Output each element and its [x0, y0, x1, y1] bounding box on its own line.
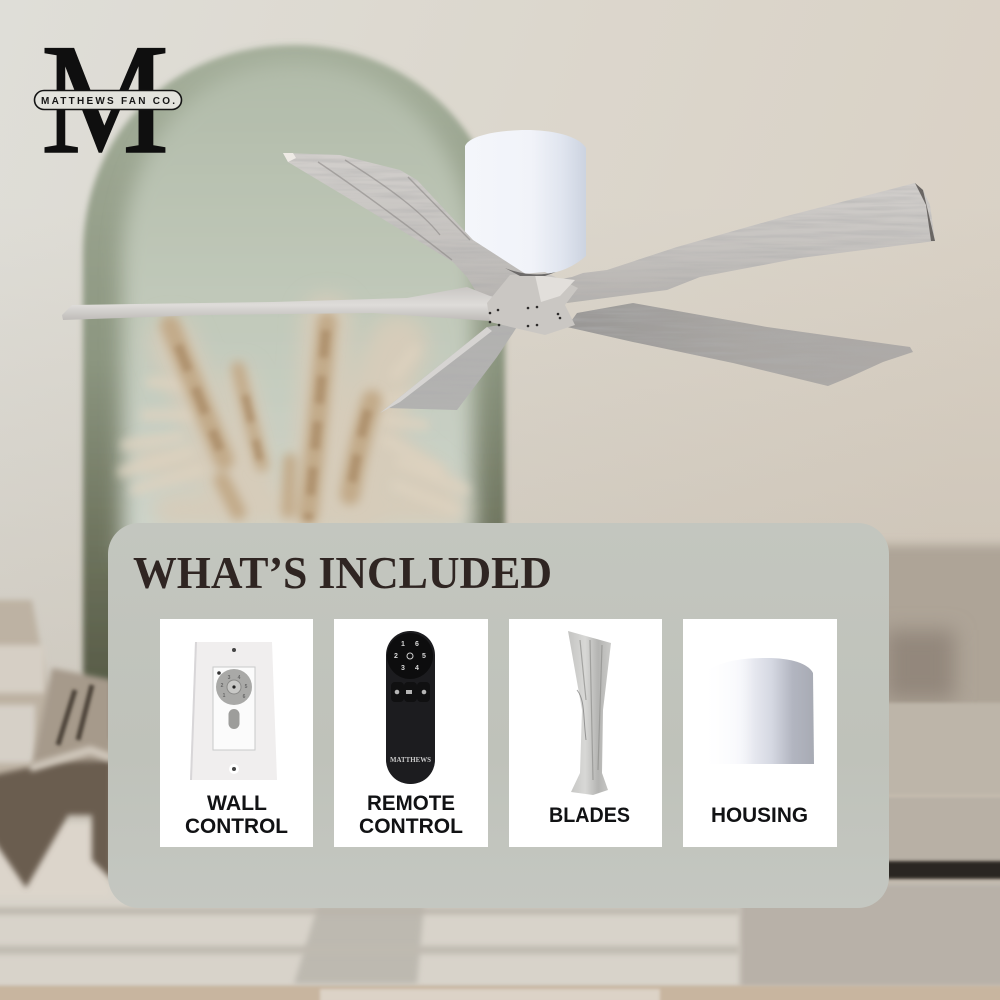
logo name pill: [34, 90, 182, 110]
icon: blade: [568, 631, 611, 795]
icon: wall control plate: 2: [221, 683, 224, 689]
icon: remote: 3: [401, 665, 405, 672]
sofa on the right: [860, 545, 1000, 879]
fan housing: [465, 130, 586, 275]
arched wall niche: [83, 45, 505, 740]
label: [359, 792, 463, 838]
blade: upper left: [283, 153, 535, 318]
label: CONTROL: [359, 815, 463, 838]
heading: WHAT’S INCLUDED: [133, 547, 552, 598]
blade: upper right: [540, 183, 935, 305]
pampas grass: [122, 320, 465, 520]
icon: remote: 2: [394, 653, 398, 660]
icon: remote: MATTHEWS: [390, 756, 431, 764]
logo name pill: MATTHEWS FAN CO.: [41, 96, 175, 107]
brand logo: [34, 12, 182, 187]
icon: wall control plate: 5: [245, 684, 248, 690]
blade: lower right: [567, 303, 913, 386]
icon: remote: 5: [422, 653, 426, 660]
icon: remote: 1: [401, 641, 405, 648]
card: wall control: [160, 619, 313, 847]
icon: wall control plate: 6: [243, 694, 246, 700]
floor: [0, 822, 1000, 1000]
card: remote control: [334, 619, 488, 847]
icon: wall control plate: 3: [228, 675, 231, 681]
blade: lower left: [380, 322, 520, 413]
icon: remote: [386, 631, 435, 784]
panel: what's included: [108, 523, 889, 908]
label: REMOTE: [367, 792, 455, 815]
label: CONTROL: [185, 815, 288, 838]
fan hub with screws: [487, 268, 578, 335]
icon: remote: 6: [415, 641, 419, 648]
card: blades: [509, 619, 662, 847]
ceiling fan: [62, 130, 935, 413]
logo monogram M: M: [41, 12, 169, 187]
armchair and throw blanket: [0, 600, 112, 888]
icon: wall control plate: [190, 642, 277, 780]
icon: wall control plate: 1: [223, 693, 226, 699]
icon: housing: [704, 654, 816, 766]
icon: wall control plate: 4: [238, 675, 241, 681]
icon: remote: 4: [415, 665, 419, 672]
label: [185, 792, 288, 838]
blade: long left: [62, 287, 530, 323]
label: HOUSING: [711, 804, 808, 827]
card: housing: [683, 619, 837, 847]
label: BLADES: [549, 804, 630, 827]
label: WALL: [207, 792, 267, 815]
